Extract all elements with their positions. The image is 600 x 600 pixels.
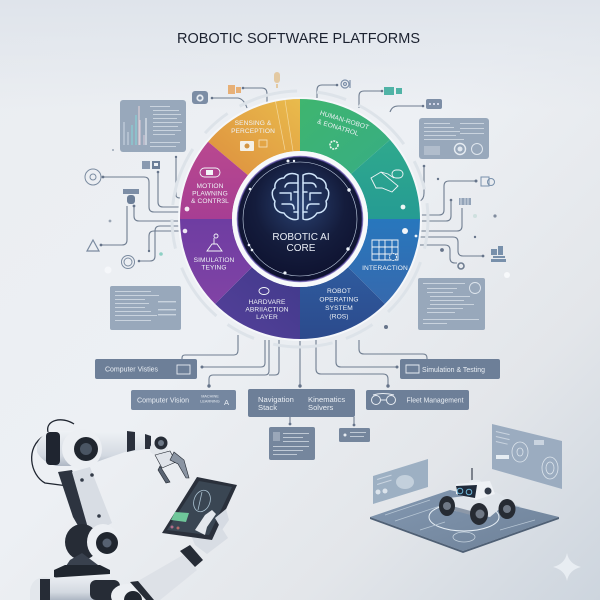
- upper arm link: [72, 467, 112, 535]
- segment: human-robot and control: [300, 99, 390, 174]
- panel: bottom left text: [110, 286, 181, 330]
- segment: robot operating system: (ROS): [329, 314, 349, 320]
- white hub ring: [232, 151, 368, 287]
- core label: CORE: [287, 243, 316, 254]
- box: computer visties: [95, 359, 197, 379]
- icon: speaker: [341, 80, 350, 88]
- segment: interaction: [348, 219, 420, 304]
- core label: ROBOTIC AI: [272, 232, 330, 243]
- upper arm dark strip: [58, 470, 92, 536]
- segment: robot operating system: SYSTEM: [325, 305, 353, 312]
- icon: projector: [123, 189, 139, 204]
- icon: grid tag: [459, 198, 471, 205]
- segment: robot operating system: ROBOT: [327, 288, 351, 295]
- box: computer vision: [131, 390, 236, 410]
- forearm lower: [138, 555, 197, 600]
- segment: hardware abstraction layer: HARDVARE: [249, 299, 286, 306]
- elbow joint: [65, 524, 119, 560]
- connector lines: [100, 84, 510, 426]
- panel: top right: [419, 118, 489, 159]
- shoulder housing: [37, 431, 78, 466]
- segment: hardware abstraction layer: ABRIIACTION: [245, 306, 289, 314]
- fingers on tablet: [195, 510, 216, 535]
- floating panel: left of rover: [373, 459, 428, 504]
- base collar: [54, 565, 110, 581]
- base neck: [60, 553, 98, 575]
- wheel outer rim: [178, 97, 422, 341]
- base body: [48, 574, 122, 600]
- title: ROBOTIC SOFTWARE PLATFORMS: [177, 30, 420, 47]
- wheel: [178, 97, 422, 341]
- icon: gear right: [458, 263, 464, 269]
- box: navigation stack and kinematics solvers: Navigation: [258, 395, 294, 404]
- icon: gallery squares: [142, 161, 160, 169]
- icon: document chart: [481, 177, 494, 186]
- segment: interaction: INTERACTION: [362, 265, 408, 272]
- segment: simulation testing: [180, 219, 252, 304]
- head: [456, 481, 495, 500]
- segment: motion planning and control: & CONTR3L: [191, 198, 229, 205]
- segment: sensing and perception: PERCEPTION: [231, 128, 275, 135]
- segment: motion planning and control: [180, 142, 248, 219]
- segment: sensing and perception: SENSING &: [235, 120, 272, 127]
- panel: top left chart: [120, 100, 186, 152]
- icon: brain: [272, 174, 329, 220]
- icon: orange video: [228, 85, 241, 94]
- box: fleet management: Fleet Management: [406, 396, 464, 404]
- segment: simulation testing: SIMULATION: [194, 257, 235, 264]
- icon: triangle: [87, 240, 99, 251]
- base rotary: [90, 580, 143, 600]
- segment: motion planning and control: MOTION: [197, 183, 224, 190]
- segment: hardware abstraction layer: [215, 267, 300, 339]
- panel: bottom right code: [418, 278, 485, 330]
- wrist joint: [150, 436, 168, 454]
- gripper: [155, 451, 189, 483]
- box: computer vision: Computer Vision: [137, 396, 189, 404]
- box: navigation stack and kinematics solvers: [248, 389, 355, 417]
- AI core: [238, 156, 362, 282]
- icon: ring left: [85, 169, 101, 185]
- box: fleet management: [366, 390, 469, 410]
- platform: [370, 490, 559, 553]
- card: mini status card: [339, 428, 370, 442]
- card: small data card: [269, 427, 315, 460]
- segment: hardware abstraction layer: LAYER: [256, 314, 278, 321]
- forearm upper: [85, 431, 148, 466]
- icon: double ring: [122, 256, 134, 268]
- robot arm with tablet: [30, 420, 237, 600]
- segment: robot operating system: OPERATING: [319, 296, 359, 304]
- chassis: [449, 492, 510, 517]
- box: computer vision: LEARNING: [200, 400, 220, 404]
- rover robot: [439, 468, 516, 525]
- segment: sensing and perception: [208, 99, 300, 175]
- antenna: [471, 468, 473, 482]
- wheels: [439, 496, 516, 525]
- box: navigation stack and kinematics solvers: Kinematics: [308, 395, 345, 404]
- box: computer vision: MACHINE: [201, 394, 219, 398]
- segment: motion planning and control: PLAWNING: [192, 190, 228, 198]
- shoulder joint: [62, 429, 102, 469]
- box: computer visties: Computer Visties: [105, 364, 158, 374]
- box: navigation stack and kinematics solvers: Solvers: [308, 403, 334, 412]
- floating panel: right of rover: [492, 424, 562, 489]
- box: simulation and testing: Simulation & Testing: [422, 365, 485, 374]
- cables: [32, 420, 74, 486]
- icon: stamp: [491, 246, 506, 262]
- box: navigation stack and kinematics solvers: Stack: [258, 403, 277, 412]
- segment: simulation testing: TEYING: [201, 264, 227, 272]
- segment: handshake: [351, 140, 420, 219]
- segment: human-robot and control: & EONATROL: [316, 118, 360, 138]
- box: computer vision: A: [224, 398, 230, 407]
- segment: robot operating system: [300, 267, 385, 339]
- icon: camera top: [192, 91, 208, 104]
- icon: chat bubble: [426, 99, 442, 109]
- segment: human-robot and control: HUMAN-ROBOT: [319, 110, 370, 131]
- outer faint ring: [172, 91, 428, 347]
- icon: sparkle: [553, 553, 581, 581]
- hand: [190, 522, 228, 554]
- icon: teal screen: [384, 87, 402, 95]
- icon: microphone: [274, 72, 280, 88]
- box: simulation and testing: [400, 359, 500, 379]
- tablet: [162, 477, 237, 540]
